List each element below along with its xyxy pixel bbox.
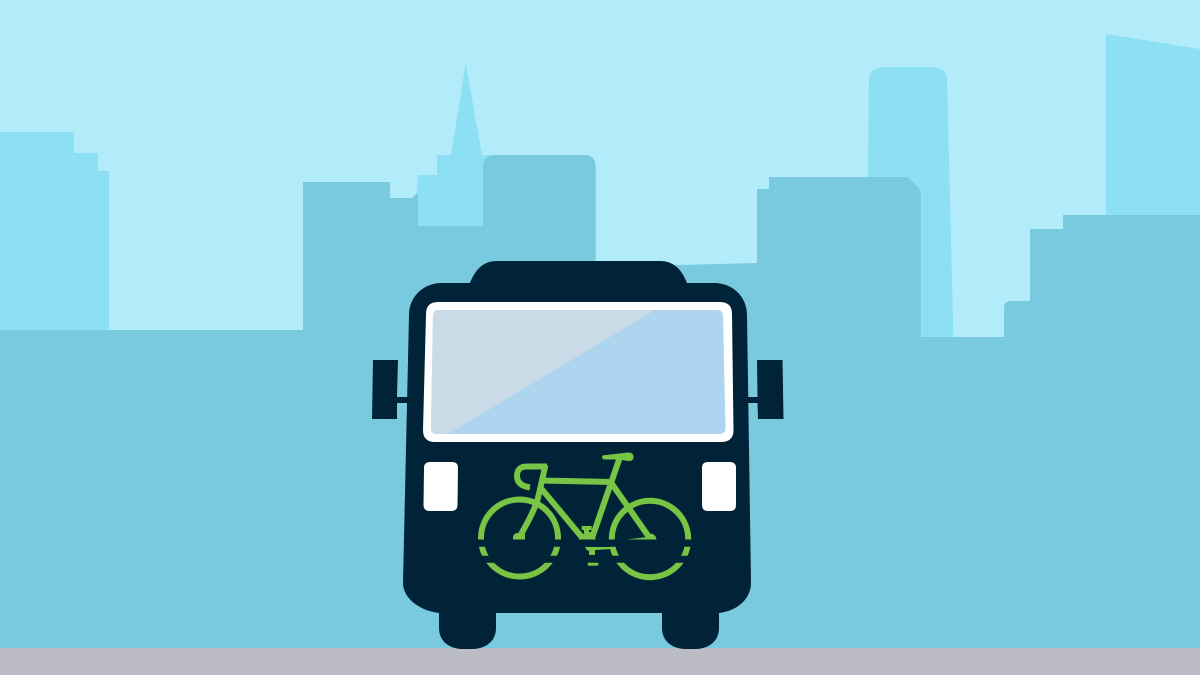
- icon: left mirror: [372, 360, 409, 419]
- left headlight: [424, 462, 458, 511]
- windshield glass: [431, 310, 726, 434]
- crank and pedal: [585, 547, 612, 555]
- lower pedal: [588, 563, 598, 566]
- saddle: [602, 452, 634, 461]
- right wheel: [612, 501, 688, 577]
- front skyline buildings: [0, 155, 1200, 675]
- road: [0, 648, 1200, 675]
- rear dropout: [627, 534, 656, 540]
- building: left stepped tower: [0, 132, 109, 335]
- back skyline buildings: [0, 34, 1200, 340]
- left wheel: [481, 500, 558, 576]
- bicycle: [481, 452, 688, 577]
- seat post: [582, 526, 592, 533]
- windshield glare: [431, 310, 655, 434]
- handlebar: [517, 466, 547, 488]
- windshield frame: [423, 302, 734, 442]
- bottom bracket: [578, 532, 596, 540]
- bus: [372, 261, 784, 649]
- fork: [520, 465, 546, 536]
- bus body: [403, 261, 751, 649]
- building: spire tower: [417, 63, 490, 226]
- building: tapered rounded tower: [866, 67, 954, 340]
- frame: [540, 457, 649, 541]
- building: right slanted tower: [1106, 34, 1200, 220]
- icon: right mirror: [746, 360, 784, 419]
- right headlight: [702, 462, 736, 511]
- left hub: [513, 533, 525, 540]
